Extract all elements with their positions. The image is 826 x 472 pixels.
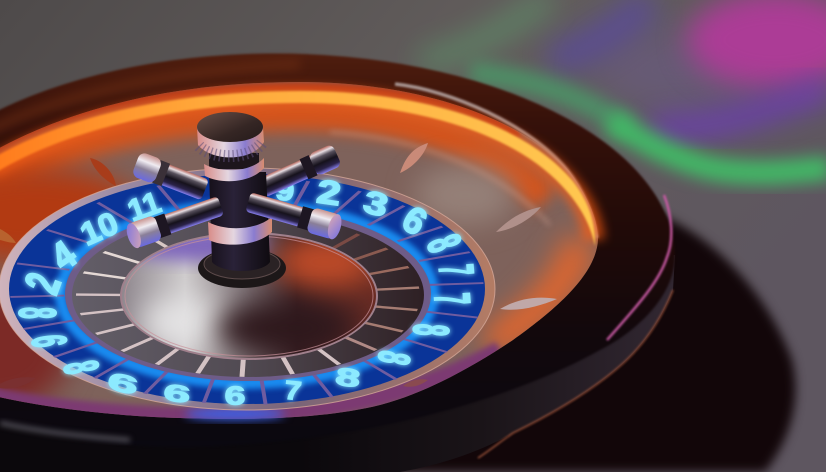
numbers: 8	[368, 347, 420, 368]
numbers: 6	[104, 367, 141, 401]
dish pale arc	[330, 132, 550, 225]
front arm right end face	[325, 213, 344, 241]
wheel base band	[0, 255, 675, 472]
outer rim top	[0, 53, 675, 447]
green light streak	[610, 120, 826, 173]
back arm right	[257, 144, 342, 199]
cap band	[197, 127, 264, 157]
numbers: 8	[334, 362, 362, 393]
front arm left	[124, 193, 225, 250]
left rim warm tone	[0, 64, 300, 130]
diamond top	[400, 143, 428, 173]
cell dividers	[10, 178, 483, 404]
numbers: 10	[75, 204, 124, 252]
dish lower purple band	[0, 350, 500, 416]
numbers: 7	[428, 262, 484, 278]
dish diamond markers	[0, 143, 557, 389]
back arm left	[131, 151, 210, 202]
hub orange glow	[275, 234, 375, 290]
numbers: 6	[395, 197, 435, 244]
numbers: 2	[314, 173, 343, 213]
numbers: 7	[423, 291, 480, 307]
front arm right	[245, 189, 344, 241]
diamond right lower	[500, 298, 557, 310]
dish dark left edge	[0, 290, 70, 410]
numbers: 8	[417, 228, 472, 259]
numbers: 2	[14, 266, 72, 300]
hub dark shade	[215, 302, 355, 354]
number ring	[9, 174, 485, 404]
numbers: 11	[123, 185, 165, 229]
numbers: 3	[359, 183, 392, 225]
dish	[0, 80, 610, 430]
blue glow under ring	[185, 408, 285, 420]
dish silver sheen	[415, 165, 515, 225]
dish band under orange ring	[0, 115, 545, 200]
lower collar	[208, 217, 272, 245]
orange neon ring	[0, 91, 595, 246]
cap top	[197, 112, 263, 142]
numbers: 4	[43, 231, 84, 279]
numbers	[8, 173, 484, 410]
upper collar	[204, 158, 264, 181]
metal ring around numbers	[0, 168, 495, 410]
number ring inner glow	[61, 205, 433, 383]
numbers: 7	[283, 376, 303, 407]
numbers: 6	[224, 381, 246, 410]
numbers: 6	[22, 332, 77, 350]
diamond right upper	[496, 207, 541, 232]
violet streak	[650, 88, 826, 128]
cap ridges	[199, 143, 262, 156]
pocket spokes	[76, 232, 419, 377]
diamond lower left	[0, 377, 36, 389]
numbers: 8	[53, 357, 109, 378]
numbers: 8	[402, 323, 459, 337]
front arm left end face	[124, 221, 144, 250]
blue haze	[550, 0, 650, 60]
hub purple top	[120, 229, 270, 261]
dish orange glow left	[0, 167, 145, 263]
wheel shadow	[300, 215, 796, 472]
numbers: 8	[8, 307, 65, 319]
numbers: 9	[274, 174, 296, 207]
dish orange glow right	[490, 240, 580, 345]
green faint streak	[470, 72, 630, 130]
diamond left	[0, 229, 16, 243]
neck	[209, 153, 259, 169]
pink rim highlight	[607, 195, 671, 340]
diamond lower right	[403, 379, 428, 387]
diamond upper left	[90, 158, 116, 186]
upper green streak	[420, 0, 550, 62]
hub bright reflection	[143, 298, 227, 346]
base disc	[198, 248, 286, 288]
silver outer ring edge	[395, 84, 597, 238]
column	[209, 172, 270, 271]
purple haze	[590, 30, 770, 110]
spindle turret	[124, 112, 344, 288]
pocket ring	[65, 207, 431, 381]
dish upper red band	[0, 87, 520, 152]
central hub cone	[120, 229, 380, 362]
orange rim line	[478, 290, 673, 458]
lower rim sheen	[0, 423, 130, 440]
numbers: 6	[162, 379, 192, 409]
magenta glow	[687, 0, 826, 88]
